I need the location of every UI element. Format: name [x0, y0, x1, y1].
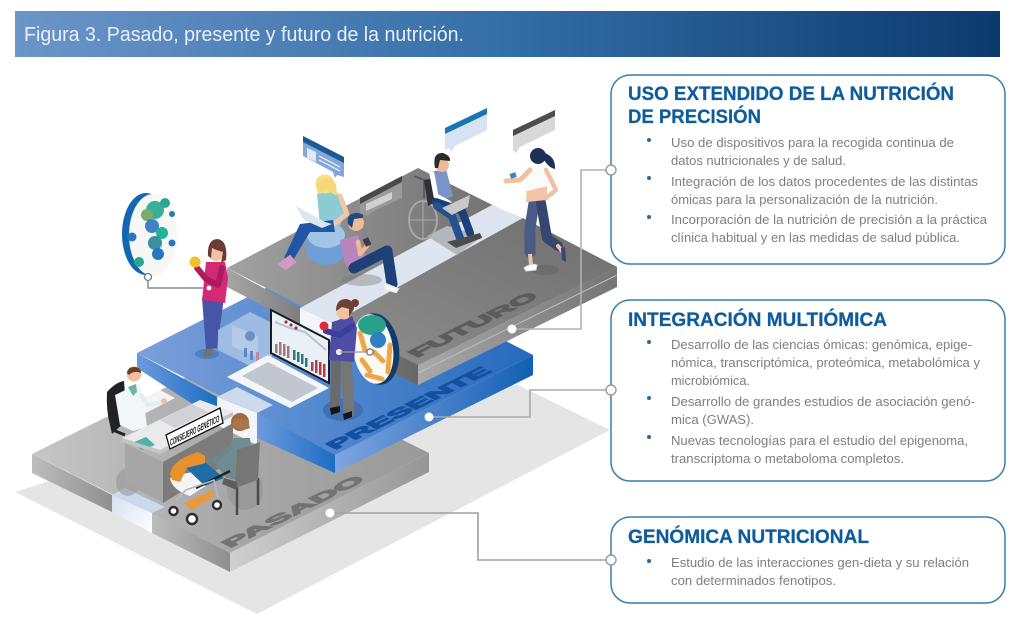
connector: pasado [326, 508, 606, 560]
bullet list: Desarrollo de las ciencias ómicas: genómica, epige- [671, 337, 972, 352]
connector: presente [424, 390, 606, 422]
speech panel: grey [513, 110, 555, 153]
bullet list: ómicas para la personalización de la nutrición. [671, 192, 938, 207]
heading: DE PRECISIÓN [628, 104, 761, 128]
consultation desk [116, 400, 233, 503]
heading: USO EXTENDIDO DE LA NUTRICIÓN [628, 81, 954, 105]
heading: GENÓMICA NUTRICIONAL [628, 524, 869, 548]
floor shadow [15, 385, 610, 614]
panel: uso extendido de la nutrición de precisión [606, 75, 1005, 264]
speech panel: blue [303, 136, 344, 178]
person: blonde with laptop on beanbag [279, 174, 347, 269]
sign: consejero genético: CONSEJERO GENÉTICO [170, 413, 219, 449]
bullet list: Incorporación de la nutrición de precisión a la práctica [671, 212, 988, 227]
label: PASADO: PASADO [217, 474, 369, 550]
lens: gut bacteria [348, 310, 404, 388]
bullet list: con determinados fenotipos. [671, 573, 836, 588]
bullet list: Nuevas tecnologías para el estudio del epigenoma, [671, 433, 968, 448]
bullet list: microbiómica. [671, 373, 750, 388]
label: PRESENTE: PRESENTE [322, 365, 496, 452]
bullet list [647, 555, 969, 588]
bullet list: clínica habitual y en las medidas de salud pública. [671, 230, 960, 245]
panel: integración multiómica [606, 300, 1005, 481]
person: woman in wheelchair with laptop [409, 153, 482, 248]
heading: INTEGRACIÓN MULTIÓMICA [628, 307, 887, 331]
bullet list: Uso de dispositivos para la recogida continua de [671, 135, 954, 150]
ghost data panels [218, 312, 272, 368]
bullet list: Estudio de las interacciones gen-dieta y su relación [671, 555, 969, 570]
platform: futuro [227, 168, 617, 385]
bullet list [647, 337, 980, 466]
bullet list: Desarrollo de grandes estudios de asociación genó- [671, 394, 975, 409]
person: runner with smartwatch [506, 148, 566, 275]
bullet list: datos nutricionales y de salud. [671, 153, 846, 168]
laptop with charts [227, 310, 329, 408]
person: woman in magenta holding fruit [190, 239, 228, 359]
speech panel: light [445, 108, 487, 152]
bullet list: mica (GWAS). [671, 412, 754, 427]
speech panel: dark [360, 176, 402, 216]
person: mother seated [208, 413, 263, 515]
connector: futuro [508, 170, 606, 334]
person: woman with fruit at laptop [320, 299, 373, 421]
baby stroller [170, 452, 230, 524]
title bar [15, 11, 1000, 57]
lens: genome microbes [122, 193, 203, 288]
heading [628, 81, 954, 128]
platform: presente [137, 253, 533, 473]
bullet list: transcriptoma o metaboloma completos. [671, 451, 904, 466]
platform: pasado [32, 355, 429, 572]
person: man sitting with phone [340, 213, 398, 292]
bullet list [647, 135, 988, 245]
person: geneticist doctor in chair [107, 366, 167, 435]
label: FUTURO: FUTURO [404, 290, 543, 360]
panel: genómica nutricional [606, 517, 1005, 603]
title bar: Figura 3. Pasado, presente y futuro de la nutrición. [24, 24, 464, 46]
bullet list: Integración de los datos procedentes de las distintas [671, 174, 978, 189]
bullet list: nómica, transcriptómica, proteómica, metabolómica y [671, 355, 980, 370]
